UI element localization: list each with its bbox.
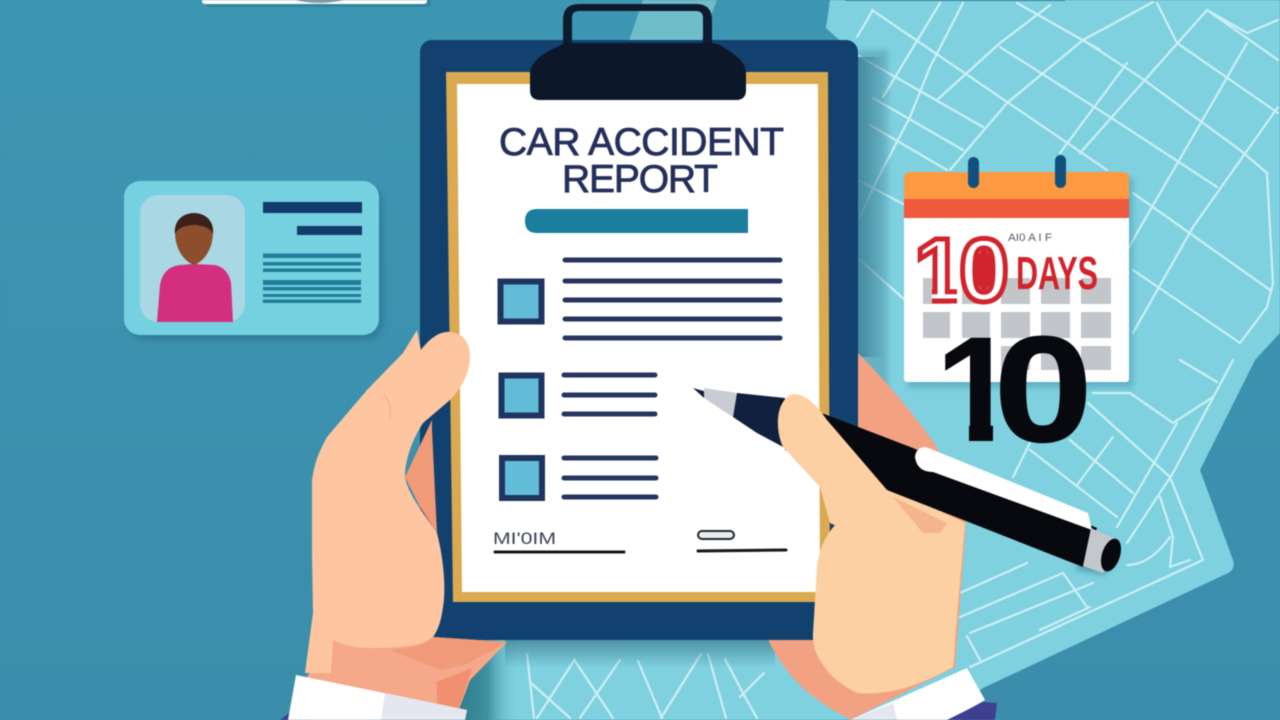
pen metal cone — [704, 388, 737, 417]
calendar red 10: 1 — [914, 221, 964, 321]
calendar red 10: 0 — [959, 221, 1009, 321]
street map — [440, 0, 1280, 720]
right hand finger — [778, 394, 887, 530]
left wrist crease — [330, 637, 507, 712]
palm shade — [893, 497, 947, 533]
ID text lines — [263, 202, 362, 303]
date line — [698, 531, 786, 551]
pen tip — [693, 388, 707, 398]
top cards cropped at edge — [202, 0, 1065, 7]
checklist item 2 — [502, 375, 655, 416]
calendar small label: AI0 A I F — [1008, 232, 1052, 244]
signature line — [493, 529, 624, 552]
large black number — [944, 334, 1087, 444]
pen barrel — [780, 400, 1097, 567]
clipboard paper — [457, 84, 820, 592]
pen grip — [733, 393, 785, 448]
calendar red 10 — [916, 235, 1009, 306]
clipboard gold frame — [446, 72, 830, 602]
right hand back — [767, 353, 966, 720]
left wrist — [300, 630, 507, 712]
calendar rings — [968, 155, 1066, 188]
pen clip — [915, 447, 1092, 530]
teal heading bar — [525, 209, 748, 233]
large black number: 0 — [994, 305, 1092, 473]
checklist item 3 — [502, 458, 656, 498]
pen end band — [1083, 528, 1118, 573]
left shirt cuff and sleeve — [280, 675, 467, 720]
report title: CAR ACCIDENT — [499, 121, 784, 164]
left hand — [305, 330, 507, 712]
right shirt cuff and sleeve — [850, 668, 997, 720]
right hand palm — [813, 420, 965, 693]
checklist item 1 — [500, 260, 780, 338]
clipboard clip — [530, 4, 746, 100]
calendar — [904, 155, 1133, 388]
pen end cap — [1097, 536, 1125, 574]
calendar date grid — [923, 278, 1111, 370]
pen — [693, 388, 1125, 575]
ID photo — [140, 195, 245, 322]
signature line: MI'0IM — [493, 529, 556, 548]
large black number: 1 — [935, 305, 1018, 473]
panel: clipboard — [420, 4, 858, 640]
calendar days label: DAYS — [1016, 247, 1098, 299]
panel: ID card — [124, 181, 383, 340]
report title — [499, 121, 784, 201]
report title: REPORT — [562, 158, 718, 201]
